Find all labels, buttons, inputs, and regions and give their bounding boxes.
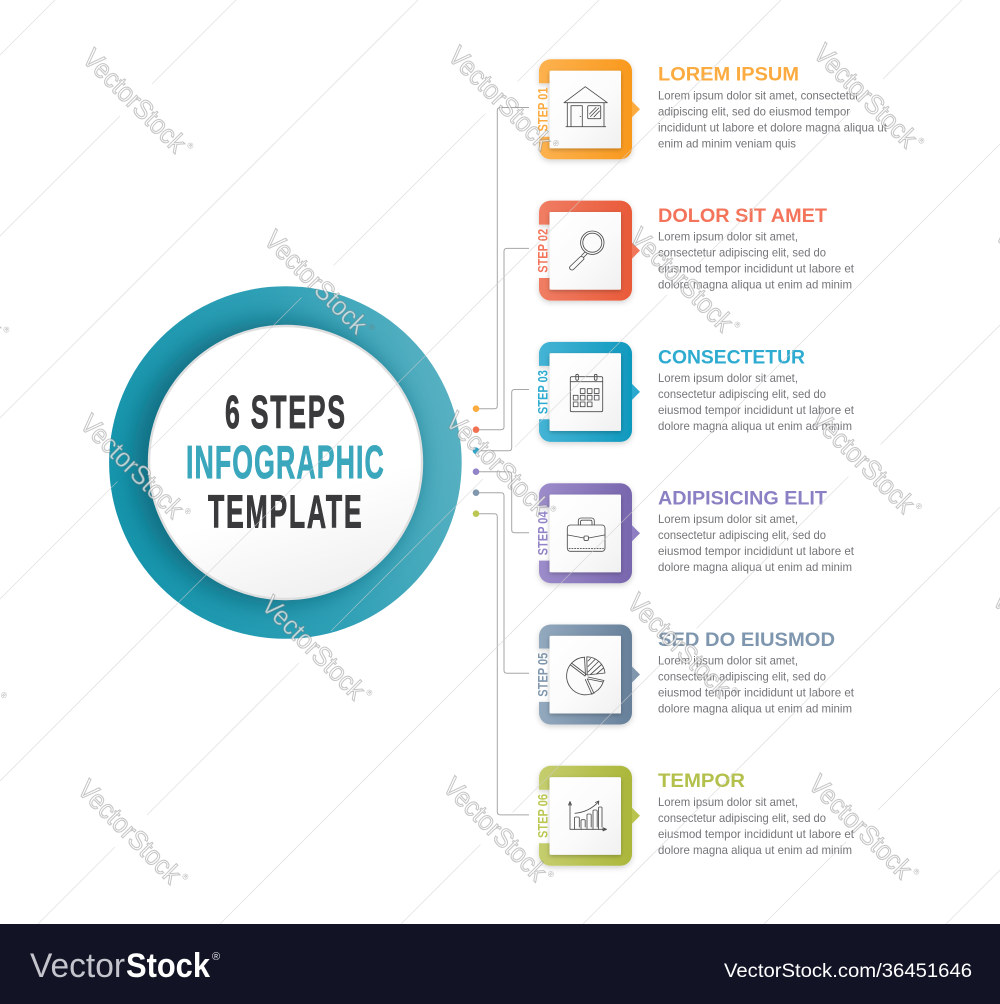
body text: consectetur adipiscing elit, sed do: [658, 387, 826, 401]
step 3 frame: [539, 342, 632, 442]
heading: DOLOR SIT AMET: [658, 205, 827, 227]
watermarks: VectorStock: [624, 222, 739, 338]
watermarks: ®: [366, 322, 377, 333]
footer logo: ®: [212, 951, 220, 963]
connector 4: [473, 468, 529, 533]
step 4 pointer: [632, 525, 640, 541]
step 6 pointer: [632, 808, 640, 824]
title: template: TEMPLATE: [208, 486, 362, 537]
step 5 card: [550, 636, 621, 714]
watermarks: VectorStock: [258, 225, 374, 340]
watermarks: VectorStock: [805, 404, 921, 519]
step 5 pointer: [632, 666, 640, 682]
step 1 frame: [539, 59, 632, 159]
watermarks: ®: [729, 685, 740, 696]
outer teal ring: [109, 286, 462, 639]
watermarks: VectorStock: [256, 590, 371, 706]
watermarks: VectorStock: [437, 772, 553, 887]
body text: consectetur adipiscing elit, sed do: [658, 246, 826, 260]
connector lines and dots: [473, 108, 529, 815]
footer url: VectorStock.com/36451646: [724, 961, 972, 982]
step 4 frame: [539, 483, 632, 583]
body text: Lorem ipsum dolor sit amet,: [658, 795, 798, 809]
watermarks: VectorStock: [803, 769, 918, 885]
body text: Lorem ipsum dolor sit amet,: [658, 230, 798, 244]
heading: SED DO EIUSMOD: [658, 629, 835, 651]
heading: LOREM IPSUM: [658, 64, 799, 86]
watermarks: ®: [1, 325, 12, 335]
watermarks: ®: [548, 504, 559, 514]
watermarks: ®: [182, 506, 193, 517]
step 2 label: STEP 02: [535, 229, 551, 273]
icon: calendar: [570, 374, 603, 412]
step 3 card: [550, 353, 621, 431]
step 1 pointer: [632, 101, 640, 117]
icon: house: [564, 87, 607, 127]
connector 1: [473, 108, 529, 412]
watermarks: ®: [911, 867, 922, 877]
body text: adipiscing elit, sed do eiusmod tempor: [658, 104, 850, 118]
footer logo: Vector: [30, 947, 125, 985]
body text: dolore magna aliqua ut enim ad minim: [658, 843, 852, 857]
heading: TEMPOR: [658, 770, 745, 792]
connector 6: [473, 510, 529, 815]
inner white disc: [149, 326, 422, 599]
footer banner: [0, 924, 1000, 1004]
body text: dolore magna aliqua ut enim ad minim: [658, 702, 852, 716]
body text: [658, 654, 855, 716]
body text: Lorem ipsum dolor sit amet, consectetur: [658, 88, 859, 102]
watermarks: ®: [180, 872, 191, 882]
step 3 label: STEP 03: [535, 370, 551, 414]
watermarks: ®: [185, 141, 196, 151]
title: infographic: INFOGRAPHIC: [186, 436, 384, 488]
body text: eiusmod tempor incididunt ut labore et: [658, 686, 855, 700]
watermarks: VectorStock: [621, 588, 737, 703]
step 6 label: STEP 06: [535, 794, 551, 838]
watermarks: ®: [364, 688, 375, 698]
body text: [658, 512, 855, 574]
body text: [658, 371, 855, 433]
step 2 panel: [535, 201, 855, 301]
body text: Lorem ipsum dolor sit amet,: [658, 654, 798, 668]
body text: eiusmod tempor incididunt ut labore et: [658, 544, 855, 558]
body text: eiusmod tempor incididunt ut labore et: [658, 827, 855, 841]
watermarks: VectorStock: [72, 774, 187, 890]
disc shadow: [133, 320, 417, 604]
watermarks: ®: [913, 501, 924, 512]
heading: ADIPISICING ELIT: [658, 488, 827, 510]
watermarks: VectorStock: [74, 409, 190, 524]
step 5 frame: [539, 624, 632, 724]
step 5 panel: [535, 624, 855, 724]
step 5 label: STEP 05: [535, 653, 551, 697]
body text: dolore magna aliqua ut enim ad minim: [658, 278, 852, 292]
step 2 card: [550, 212, 621, 290]
step 6 panel: [535, 766, 855, 866]
footer logo: Stock: [126, 947, 210, 985]
step 4 card: [550, 495, 621, 572]
connector 3: [473, 390, 529, 454]
watermarks: ®: [545, 869, 556, 880]
step 6 frame: [539, 766, 632, 866]
watermarks: ®: [916, 136, 927, 146]
step 4 panel: [535, 483, 855, 583]
body text: dolore magna aliqua ut enim ad minim: [658, 419, 852, 433]
body text: consectetur adipiscing elit, sed do: [658, 670, 826, 684]
watermarks: VectorStock: [77, 43, 192, 159]
body text: eiusmod tempor incididunt ut labore et: [658, 262, 855, 276]
body text: [658, 88, 888, 150]
body text: consectetur adipiscing elit, sed do: [658, 528, 826, 542]
icon: pie chart: [567, 657, 605, 695]
watermarks: VectorStock: [440, 406, 555, 522]
step 1 card: [550, 71, 621, 148]
heading: CONSECTETUR: [658, 346, 805, 368]
watermarks: ®: [550, 138, 561, 149]
step 2 frame: [539, 201, 632, 301]
footer logo: [30, 947, 220, 985]
connector 5: [473, 489, 529, 673]
step 2 pointer: [632, 243, 640, 259]
step 4 label: STEP 04: [535, 511, 551, 555]
body text: dolore magna aliqua ut enim ad minim: [658, 560, 852, 574]
icon: briefcase: [567, 518, 605, 551]
icon: magnifier: [570, 231, 604, 270]
body text: [658, 230, 855, 292]
connector 2: [473, 248, 529, 433]
step 1 label: STEP 01: [535, 87, 551, 132]
step 6 card: [550, 777, 621, 855]
watermarks: ®: [732, 320, 743, 330]
icon: growth chart: [568, 801, 606, 831]
watermarks: VectorStock: [808, 38, 923, 154]
step 3 pointer: [632, 384, 640, 400]
body text: incididunt ut labore et dolore magna aliqua ut: [658, 120, 888, 134]
body text: eiusmod tempor incididunt ut labore et: [658, 403, 855, 417]
body text: Lorem ipsum dolor sit amet,: [658, 371, 798, 385]
watermarks: VectorStock: [442, 41, 558, 156]
step 3 panel: [535, 342, 855, 442]
body text: consectetur adipiscing elit, sed do: [658, 811, 826, 825]
body text: Lorem ipsum dolor sit amet,: [658, 512, 798, 526]
body text: [658, 795, 855, 857]
panel: central circle: [109, 286, 462, 639]
body text: enim ad minim veniam quis: [658, 136, 796, 150]
step 1 panel: [535, 59, 888, 159]
title: 6 steps: 6 STEPS: [225, 386, 345, 438]
